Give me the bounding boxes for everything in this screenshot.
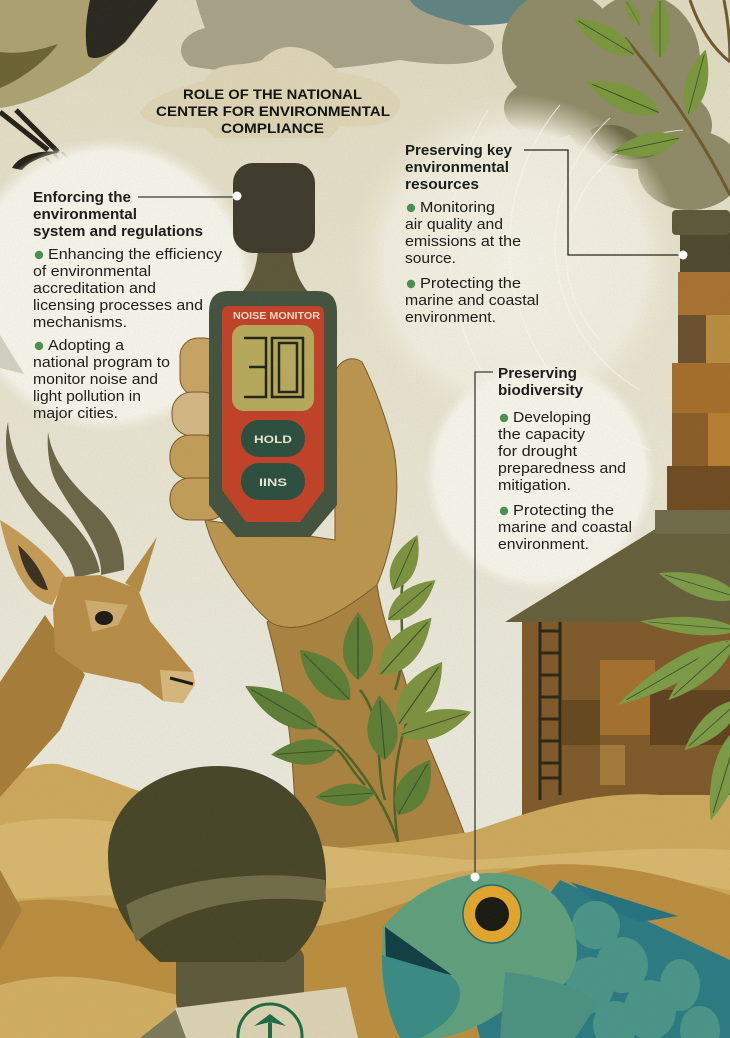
cloud group: [140, 0, 545, 138]
bullet: efficiency: mechanisms.: [33, 314, 127, 331]
hold button: HOLD: [254, 434, 292, 446]
heading: resources: [405, 143, 512, 193]
hold button: [241, 420, 305, 457]
fish scales: [566, 901, 720, 1038]
arm and hand: [170, 338, 472, 855]
bullet: marine coastal: Protecting the: [513, 502, 614, 519]
bullet: marine: environment.: [405, 309, 496, 326]
bullet: noise program: Adopting a: [48, 337, 125, 354]
smoke: [502, 0, 730, 210]
text block: resources: [405, 143, 539, 326]
bullet: marine coastal: [498, 502, 632, 553]
bullet: drought: preparedness and: [498, 460, 626, 477]
device label: NOISE MONITOR: [233, 310, 320, 322]
bullet: marine: [405, 275, 539, 326]
bullet: efficiency: Enhancing the efficiency: [48, 246, 223, 263]
faint leaf: [0, 335, 24, 374]
connector: regulations: [138, 192, 242, 200]
ins button: IINS: [259, 477, 287, 489]
bullet: drought: for drought: [498, 443, 578, 460]
glow panels: [0, 94, 683, 591]
bullet: air quality: air quality and: [405, 216, 503, 233]
top right branch leaves: [567, 0, 730, 195]
connector: resources: [524, 150, 688, 260]
bullet: drought: [498, 409, 626, 494]
microphone: [108, 766, 358, 1038]
bullet: air quality: Monitoring: [420, 199, 495, 216]
title: CENTER FOR ENVIRONMENTAL: [156, 103, 390, 119]
heading: biodiversity: [498, 366, 583, 399]
heading: resources: resources: [405, 177, 479, 193]
bullet: efficiency: of environmental: [33, 263, 151, 280]
bullet: marine: Protecting the: [420, 275, 521, 292]
bullet: noise program: light pollution in: [33, 388, 141, 405]
fish: [382, 873, 730, 1038]
bullet: drought: mitigation.: [498, 477, 571, 494]
bird: [0, 0, 158, 186]
title: [156, 86, 390, 136]
text block: enforcing: [33, 190, 223, 422]
title: COMPLIANCE: [221, 120, 324, 136]
text block: biodiversity: [498, 366, 632, 553]
bullet: drought: the capacity: [498, 426, 586, 443]
house: [505, 510, 730, 815]
heading: enforcing: environmental: [33, 207, 137, 223]
bullet: marine coastal: marine and coastal: [498, 519, 632, 536]
heading: enforcing: [33, 190, 203, 240]
bullet: air quality: source.: [405, 250, 456, 267]
card with logo: [175, 987, 358, 1038]
right palm leaves: [612, 563, 730, 824]
bullet: efficiency: accreditation and: [33, 280, 156, 297]
chimney: [667, 210, 730, 512]
heading: enforcing: Enforcing the: [33, 190, 131, 206]
heading: biodiversity: Preserving: [498, 366, 577, 382]
heading: resources: environmental: [405, 160, 509, 176]
sound wave arcs: [450, 105, 683, 490]
ladder: [540, 620, 560, 800]
bullet: drought: Developing: [513, 409, 591, 426]
center plant: [238, 530, 476, 842]
heading: resources: Preserving key: [405, 143, 512, 159]
bullet: noise program: major cities.: [33, 405, 118, 422]
bullet: noise program: [33, 337, 170, 422]
bullet: air quality: [405, 199, 521, 267]
noise monitor device: [209, 163, 337, 537]
heading: biodiversity: biodiversity: [498, 383, 583, 399]
bullet: efficiency: licensing processes and: [33, 297, 203, 314]
bullet: noise program: monitor noise and: [33, 371, 158, 388]
bullet: marine: marine and coastal: [405, 292, 539, 309]
gazelle: [0, 422, 195, 950]
connector: biodiversity: [470, 372, 493, 882]
bullet: marine coastal: environment.: [498, 536, 589, 553]
horns: [6, 422, 124, 578]
ins button: [241, 463, 305, 500]
device screen: [232, 325, 314, 411]
title: ROLE OF THE NATIONAL: [183, 86, 362, 102]
bullet: efficiency: [33, 246, 223, 331]
bullet: noise program: national program to: [33, 354, 170, 371]
eye: [95, 611, 113, 625]
bullet: air quality: emissions at the: [405, 233, 521, 250]
sand dunes: [0, 764, 730, 1038]
fish eye: [463, 885, 521, 943]
heading: enforcing: system and regulations: [33, 224, 203, 240]
